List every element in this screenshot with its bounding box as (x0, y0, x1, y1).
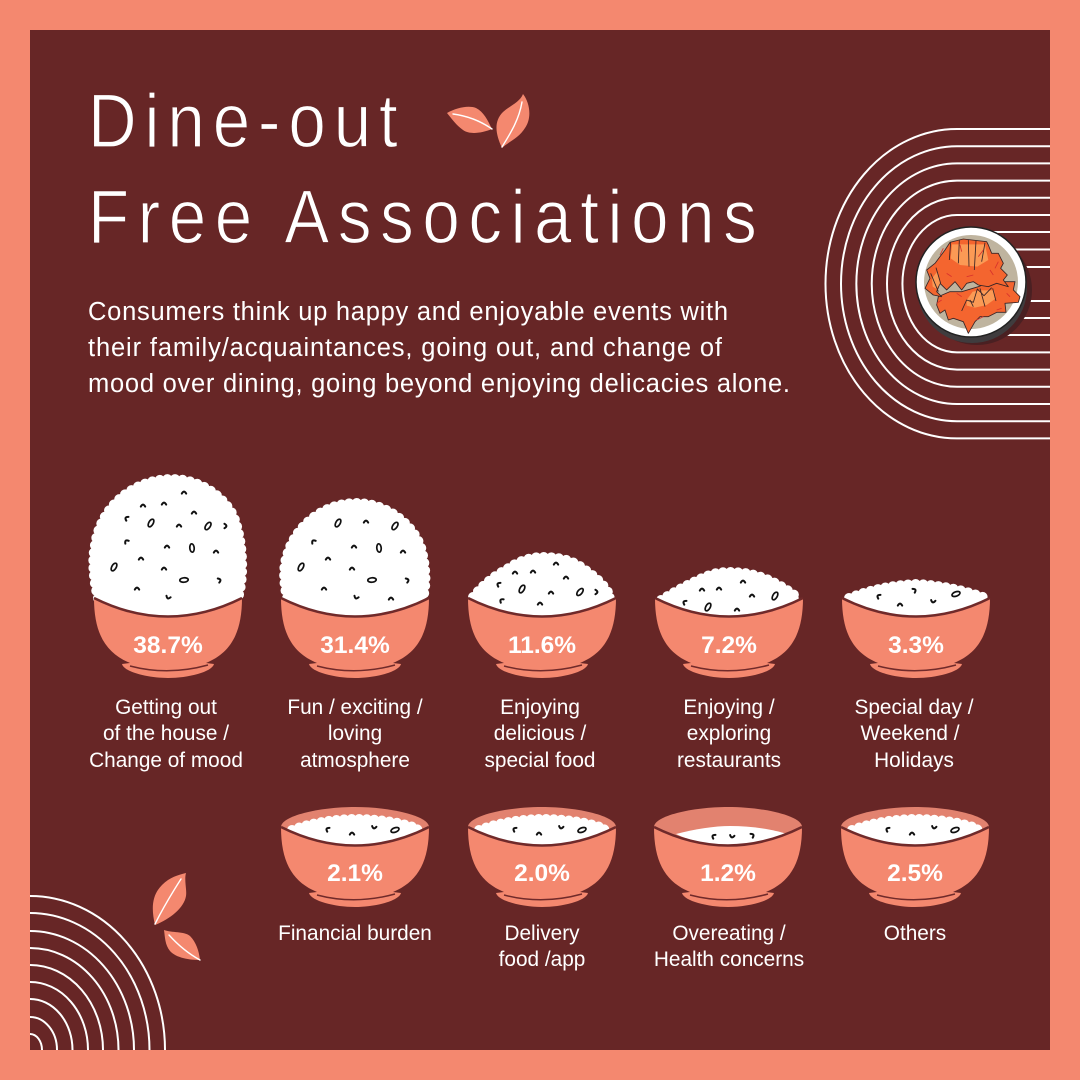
bowl: 7.2% enjoying restaurants (655, 572, 803, 678)
label: fun: Fun / exciting / (287, 696, 423, 719)
label: financial burden: Financial burden (278, 922, 432, 945)
label: overeating: Overeating / (672, 922, 786, 945)
label: special day: Weekend / (860, 722, 960, 745)
label: getting out: Change of mood (89, 749, 243, 772)
label: special day: Special day / (854, 696, 974, 719)
title: Dine-out (88, 79, 398, 164)
icon: leaves top (447, 94, 529, 148)
bowl: 11.6% enjoying delicious: 11.6% (508, 632, 576, 659)
intro paragraph: Consumers think up happy and enjoyable events with (88, 298, 728, 326)
label: special day (854, 696, 974, 772)
label: delivery (499, 922, 585, 971)
label: enjoying restaurants: exploring (687, 722, 771, 745)
bowl: 2.1% financial burden (281, 807, 429, 907)
label: getting out: of the house / (103, 722, 229, 745)
bowl: 38.7% getting out of the house: 38.7% (133, 632, 203, 659)
icon: leaves bottom left (153, 873, 200, 960)
bowl: 2.0% delivery (468, 807, 616, 907)
label: enjoying delicious: special food (484, 749, 596, 772)
label: delivery: Delivery (504, 922, 580, 945)
label: enjoying restaurants (677, 696, 781, 772)
bowl: 31.4% fun (281, 503, 429, 678)
icon: kimchi dish (916, 227, 1032, 345)
bowl: 2.5% others (841, 807, 989, 907)
label: delivery: food /app (499, 948, 585, 971)
label: fun: loving (328, 722, 382, 745)
bowl: 2.1% financial burden: 2.1% (327, 860, 383, 887)
bowl: 1.2% overeating (654, 807, 802, 907)
bowl: 11.6% enjoying delicious (468, 557, 616, 678)
bowl: 2.5% others: 2.5% (887, 860, 943, 887)
label: others: Others (884, 922, 946, 945)
label: getting out: Getting out (115, 696, 217, 719)
label: enjoying restaurants: Enjoying / (683, 696, 775, 719)
bowl: 3.3% special day (842, 584, 990, 678)
intro paragraph (88, 298, 790, 398)
label: enjoying delicious (484, 696, 596, 772)
bowl: 2.0% delivery: 2.0% (514, 860, 570, 887)
label: fun: atmosphere (300, 749, 410, 772)
label: getting out (89, 696, 243, 772)
bowl: 7.2% enjoying restaurants: 7.2% (701, 632, 757, 659)
title (88, 79, 757, 260)
decorative arches top right (826, 129, 1050, 438)
intro paragraph: their family/acquaintances, going out, and change of (88, 334, 723, 362)
decorative arcs bottom left (30, 896, 165, 1050)
label: special day: Holidays (874, 749, 954, 772)
bowl: 1.2% overeating: 1.2% (700, 860, 756, 887)
bowl: 38.7% getting out of the house (93, 479, 242, 678)
label: enjoying delicious: delicious / (494, 722, 586, 745)
label: overeating (654, 922, 804, 971)
bowl: 31.4% fun: 31.4% (320, 632, 390, 659)
label: overeating: Health concerns (654, 948, 804, 971)
label: enjoying restaurants: restaurants (677, 749, 781, 772)
label: enjoying delicious: Enjoying (500, 696, 580, 719)
intro paragraph: mood over dining, going beyond enjoying delicacies alone. (88, 370, 790, 398)
title: Free Associations (88, 175, 757, 260)
label: fun (287, 696, 423, 772)
bowl: 3.3% special day: 3.3% (888, 632, 944, 659)
